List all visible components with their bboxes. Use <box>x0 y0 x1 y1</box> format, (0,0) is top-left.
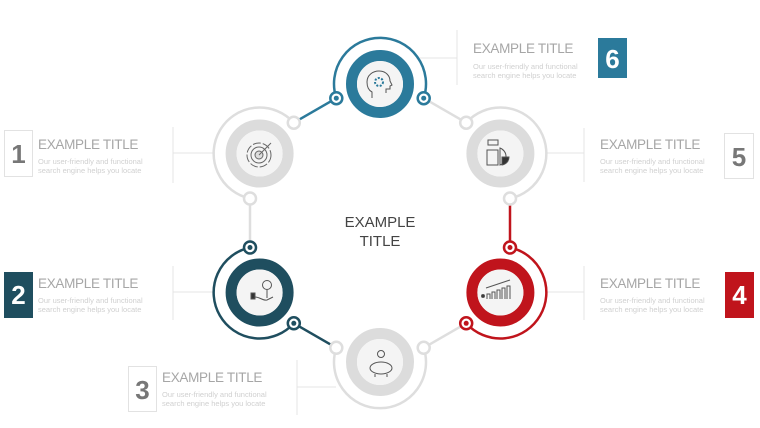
text block 3: Our user-friendly and functional <box>162 390 267 399</box>
text block 1 <box>4 130 143 176</box>
text block 5: EXAMPLE TITLE <box>600 137 700 152</box>
text block 1: Our user-friendly and functional <box>38 157 143 166</box>
text block 2: EXAMPLE TITLE <box>38 276 138 291</box>
icon: piggy bank <box>370 350 392 377</box>
center title: EXAMPLE <box>345 214 415 231</box>
text block 1: search engine helps you locate <box>38 166 141 175</box>
text block 2: search engine helps you locate <box>38 305 141 314</box>
text block 2 <box>4 272 143 318</box>
text block 3: 3 <box>135 375 150 405</box>
text block 3: EXAMPLE TITLE <box>162 370 262 385</box>
text block 1: EXAMPLE TITLE <box>38 137 138 152</box>
text block 6: 6 <box>605 44 620 74</box>
text block 4: 4 <box>732 280 747 310</box>
center title <box>345 214 415 250</box>
text block 4 <box>600 272 754 318</box>
text block 6: EXAMPLE TITLE <box>473 41 573 56</box>
text block 1: 1 <box>11 139 26 169</box>
pointer lines <box>173 30 584 415</box>
node 2: lower left <box>214 242 300 338</box>
text block 3 <box>128 366 267 412</box>
node 3: bottom <box>330 334 430 408</box>
icon: head gear <box>367 71 392 98</box>
text block 6: search engine helps you locate <box>473 71 576 80</box>
text block 4: EXAMPLE TITLE <box>600 276 700 291</box>
text block 6 <box>473 38 627 80</box>
text block 4: Our user-friendly and functional <box>600 296 705 305</box>
text block 3: search engine helps you locate <box>162 399 265 408</box>
node 4: lower right <box>460 242 546 338</box>
icon: hand with coin <box>251 280 273 300</box>
text block 2: Our user-friendly and functional <box>38 296 143 305</box>
text block 2: 2 <box>11 280 26 310</box>
icon: target <box>247 143 271 167</box>
icon: chess rook chart <box>487 140 509 165</box>
center title: TITLE <box>360 233 400 250</box>
text block 5: 5 <box>732 142 746 172</box>
connectors <box>250 98 510 348</box>
node 5: upper right <box>460 108 546 204</box>
node 6: top <box>330 38 430 112</box>
text block 5: Our user-friendly and functional <box>600 157 705 166</box>
text block 5 <box>600 134 754 178</box>
text block 5: search engine helps you locate <box>600 166 703 175</box>
text block 6: Our user-friendly and functional <box>473 62 578 71</box>
icon: growth chart <box>482 280 510 299</box>
node 1: upper left <box>214 108 300 204</box>
text block 4: search engine helps you locate <box>600 305 703 314</box>
